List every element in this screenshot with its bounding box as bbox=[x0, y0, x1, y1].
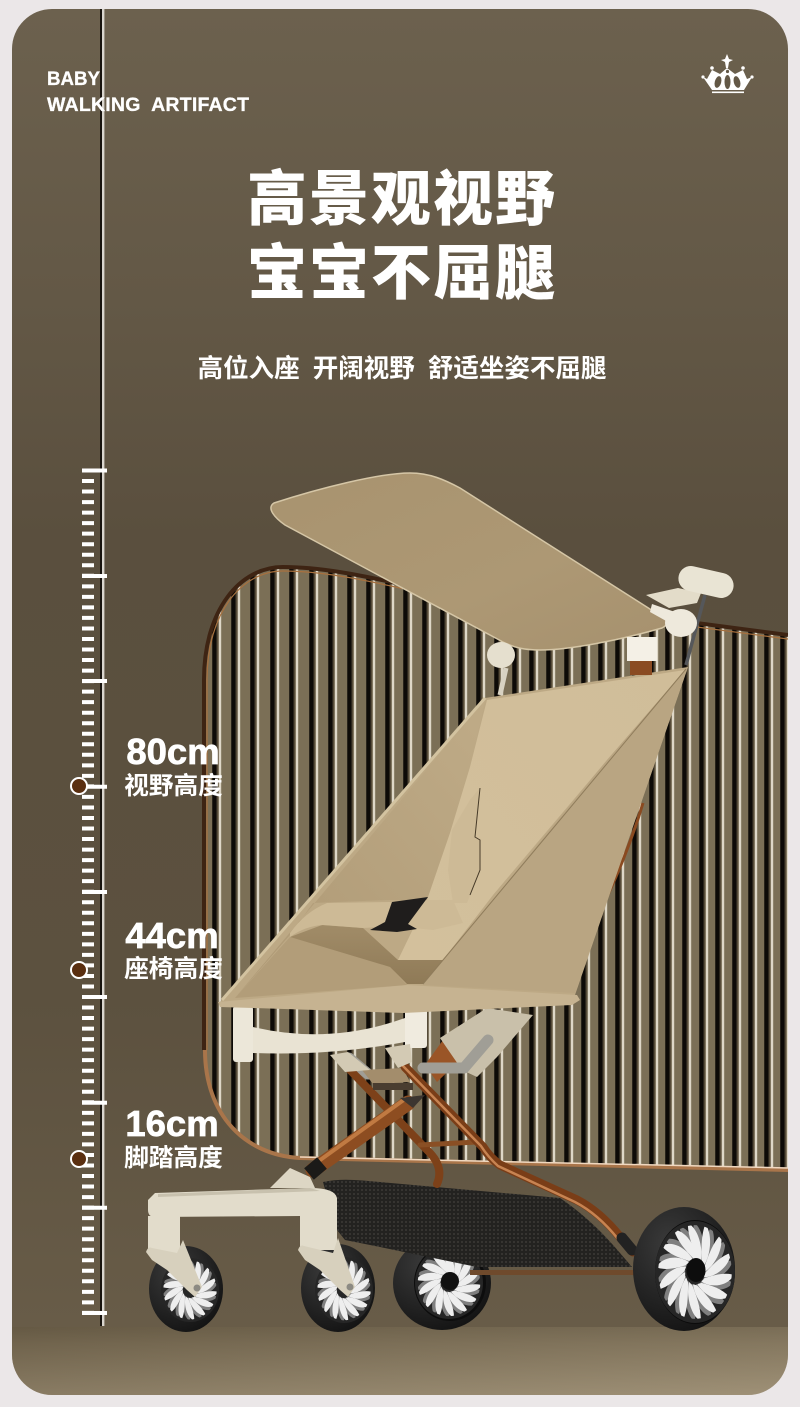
label: 80cm view height: 80cm bbox=[126, 731, 220, 772]
copper frame behind seat edge bbox=[609, 802, 644, 896]
rear far wheel bbox=[393, 1252, 491, 1330]
rear mount block bbox=[427, 1041, 457, 1082]
hinge plates bbox=[373, 1083, 425, 1108]
floor bbox=[12, 1327, 788, 1395]
seat lower left panel bbox=[235, 937, 407, 998]
canopy left joint bbox=[487, 642, 515, 695]
seat right side panel bbox=[650, 668, 688, 778]
copper frame bbox=[313, 1066, 633, 1252]
subtitle: 高位入座 开阔视野 舒适坐姿不屈腿 bbox=[198, 354, 607, 383]
rear near wheel bbox=[633, 1207, 740, 1331]
height ruler bbox=[82, 468, 107, 1315]
center post bbox=[627, 637, 657, 675]
label: 80cm view height: 视野高度 bbox=[124, 772, 223, 800]
sun canopy bbox=[271, 473, 667, 650]
seat shadow under strap bbox=[290, 925, 443, 984]
title bbox=[247, 166, 557, 307]
front footrest bbox=[148, 1163, 337, 1217]
front left wheel bbox=[146, 1216, 223, 1332]
handle bbox=[646, 564, 736, 665]
seat back shaded side bbox=[243, 858, 388, 988]
seat back lit side bbox=[398, 670, 685, 960]
label: 16cm footrest height: 脚踏高度 bbox=[124, 1144, 223, 1172]
label: 16cm footrest height bbox=[124, 1103, 223, 1172]
seat front lip bbox=[218, 985, 580, 1013]
under seat housing bbox=[440, 1008, 533, 1077]
seat support tray bbox=[233, 1007, 427, 1072]
grey brackets bbox=[349, 1040, 488, 1074]
brand text bbox=[47, 68, 249, 116]
seat body bbox=[218, 667, 688, 1013]
label: 44cm seat height bbox=[124, 915, 223, 983]
stroller bbox=[146, 473, 740, 1332]
front right wheel bbox=[298, 1214, 376, 1332]
label: 44cm seat height: 44cm bbox=[125, 915, 219, 956]
brand text: WALKING ARTIFACT bbox=[47, 94, 249, 116]
slatted wall panel bbox=[204, 560, 788, 1180]
label: 44cm seat height: 座椅高度 bbox=[124, 955, 223, 983]
title: 高景观视野 bbox=[247, 166, 557, 233]
rear axle bbox=[470, 1270, 635, 1275]
marker: 16cm bbox=[71, 1151, 87, 1167]
marker: 44cm bbox=[71, 962, 87, 978]
buckle bbox=[370, 897, 428, 932]
label: 80cm view height bbox=[124, 731, 223, 800]
marker: 80cm bbox=[71, 778, 87, 794]
lap belt bbox=[290, 900, 427, 937]
icon: crown bbox=[701, 54, 754, 93]
shoulder strap bbox=[470, 788, 480, 896]
title: 宝宝不屈腿 bbox=[247, 240, 557, 307]
brand text: BABY bbox=[47, 68, 100, 90]
storage basket bbox=[323, 1180, 632, 1267]
vertical scale line bbox=[100, 9, 104, 1326]
label: 16cm footrest height: 16cm bbox=[125, 1103, 219, 1144]
tan hinge cover bbox=[362, 1068, 410, 1084]
